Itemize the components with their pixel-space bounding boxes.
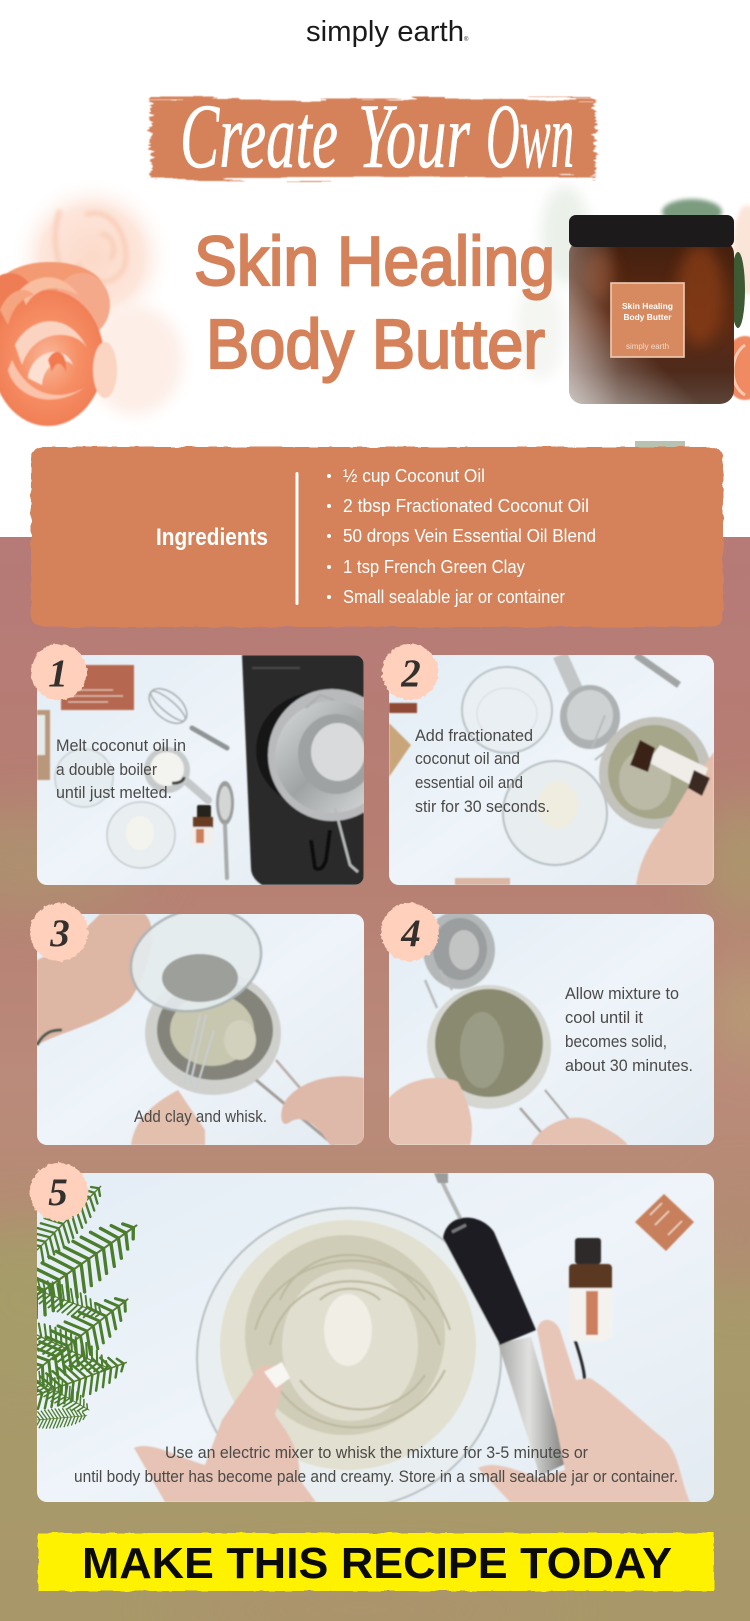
jar label: simply earth	[626, 342, 669, 351]
panel: step 2	[389, 655, 714, 885]
step 1 text: Melt coconut oil in	[56, 736, 186, 755]
call to action banner: MAKE THIS RECIPE TODAY	[82, 1539, 672, 1588]
banner: Create Your Own: Own	[486, 85, 574, 187]
banner: Create Your Own: Your	[358, 85, 471, 187]
number badge 2	[382, 644, 438, 700]
jar label	[611, 283, 684, 357]
ingredients list: ½ cup Coconut Oil	[343, 466, 485, 486]
banner: Create Your Own	[151, 85, 595, 187]
panel: step 3	[37, 895, 364, 1145]
step 2 text: Add fractionated	[415, 726, 533, 745]
panel: ingredients	[31, 441, 723, 627]
step 3 text: Add clay and whisk.	[134, 1107, 267, 1126]
step 1 text: until just melted.	[56, 783, 172, 802]
jar label: Skin Healing	[622, 301, 673, 311]
step 4 text: Allow mixture to	[565, 984, 679, 1003]
step 2 text: essential oil and	[415, 773, 523, 792]
ingredients list: 2 tbsp Fractionated Coconut Oil	[343, 496, 589, 516]
logo: simply earth: ®	[464, 36, 469, 43]
step 5 text: Use an electric mixer to whisk the mixture for 3-5 minutes or	[165, 1443, 588, 1462]
step 2 text	[415, 726, 550, 816]
step 1 text: a double boiler	[56, 760, 157, 779]
ingredients list: Small sealable jar or container	[343, 587, 565, 607]
number badge 3	[30, 903, 88, 961]
step 4 text: becomes solid,	[565, 1032, 667, 1051]
ingredients list: 50 drops Vein Essential Oil Blend	[343, 526, 596, 546]
logo: simply earth: simply earth	[306, 16, 464, 48]
ingredients list	[327, 466, 596, 607]
title: Skin Healing Body Butter	[194, 222, 555, 383]
hero image: flowers left	[0, 176, 183, 426]
hero image: amber jar with leaves	[516, 185, 750, 404]
ingredients heading: Ingredients	[156, 524, 268, 551]
title: Skin Healing Body Butter: Body Butter	[206, 305, 545, 383]
step 2 text: coconut oil and	[415, 749, 520, 768]
title: Skin Healing Body Butter: Skin Healing	[194, 222, 555, 300]
number badge 4	[381, 903, 439, 961]
panel: step 4	[389, 911, 714, 1145]
fern	[37, 1186, 138, 1429]
step 4 text: about 30 minutes.	[565, 1056, 693, 1075]
number badge 2: 2	[400, 652, 421, 695]
number badge 1: 1	[48, 652, 68, 695]
panel: step 1	[37, 655, 396, 885]
step 5 text	[74, 1443, 678, 1486]
number badge 4: 4	[400, 912, 421, 955]
number badge 1	[31, 644, 87, 700]
number badge 5	[30, 1163, 88, 1221]
ingredients list: 1 tsp French Green Clay	[343, 557, 525, 577]
step 2 text: stir for 30 seconds.	[415, 797, 550, 816]
jar label: Body Butter	[624, 312, 672, 322]
step 4 text: cool until it	[565, 1008, 643, 1027]
number badge 3: 3	[49, 912, 70, 955]
step 1 text	[56, 736, 186, 802]
number badge 5: 5	[48, 1171, 68, 1214]
panel: step 5	[37, 1173, 714, 1502]
banner: Create Your Own: Create	[180, 85, 338, 187]
step 4 text	[565, 984, 693, 1075]
step 5 text: until body butter has become pale and creamy. Store in a small sealable jar or container.	[74, 1467, 678, 1486]
